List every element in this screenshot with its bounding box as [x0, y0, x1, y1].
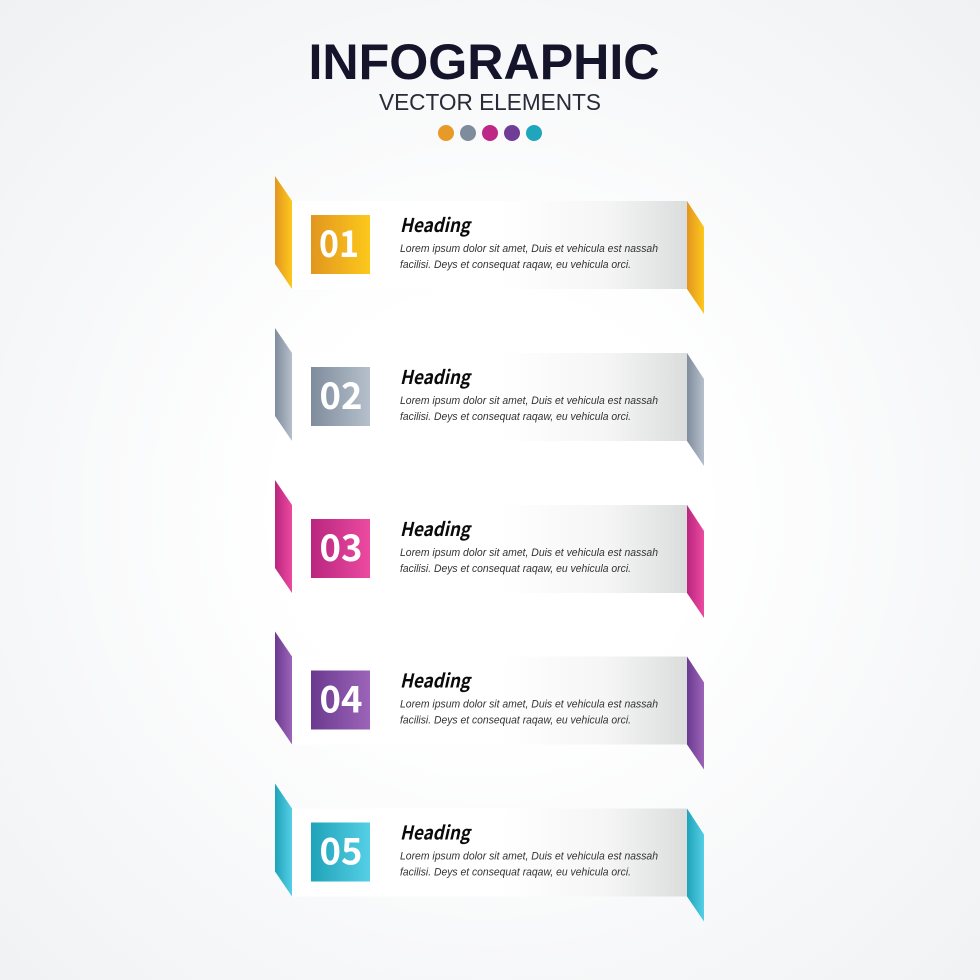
heading: Heading: [400, 515, 472, 542]
panel: step 01: [275, 176, 704, 314]
left tab: [275, 328, 292, 441]
body text: facilisi. Deys et consequat raqaw, eu vehicula orci.: [400, 866, 631, 878]
colour dots: [438, 125, 542, 141]
left tab: [275, 632, 292, 744]
heading: Heading: [400, 666, 472, 694]
left tab: [275, 784, 292, 896]
number badge: [311, 214, 370, 274]
body text: Lorem ipsum dolor sit amet, Duis et vehicula est nassah: [400, 395, 658, 407]
body text: Lorem ipsum dolor sit amet, Duis et vehicula est nassah: [400, 243, 658, 255]
body text: [400, 547, 658, 575]
title: INFOGRAPHIC: [308, 34, 660, 90]
body text: facilisi. Deys et consequat raqaw, eu vehicula orci.: [400, 259, 631, 271]
right tab: [687, 808, 704, 922]
number badge: [311, 366, 370, 426]
heading: Heading: [400, 211, 472, 238]
panel: step 04: [275, 632, 704, 770]
heading: Heading: [400, 363, 472, 390]
left tab: [275, 480, 292, 593]
body text: [400, 395, 658, 423]
body text: facilisi. Deys et consequat raqaw, eu vehicula orci.: [400, 714, 631, 726]
body text: [400, 698, 658, 726]
number badge: 05: [320, 822, 362, 876]
panel: step 05: [275, 784, 704, 922]
number badge: [311, 822, 370, 882]
right tab: [687, 353, 704, 466]
body text: Lorem ipsum dolor sit amet, Duis et vehicula est nassah: [400, 547, 658, 559]
number badge: [311, 518, 370, 578]
number badge: 02: [320, 366, 362, 420]
panel: step 02: [275, 328, 704, 466]
heading: Heading: [400, 818, 472, 846]
banner: [292, 353, 687, 441]
banner: [292, 505, 687, 593]
body text: [400, 243, 658, 271]
left tab: [275, 176, 292, 289]
panel: step 03: [275, 480, 704, 618]
body text: [400, 850, 658, 878]
right tab: [687, 656, 704, 770]
banner: [292, 656, 687, 744]
number badge: 03: [320, 518, 362, 572]
right tab: [687, 505, 704, 618]
banner: [292, 808, 687, 896]
body text: Lorem ipsum dolor sit amet, Duis et vehicula est nassah: [400, 698, 658, 710]
banner: [292, 201, 687, 289]
right tab: [687, 201, 704, 314]
number badge: 04: [320, 670, 362, 724]
number badge: [311, 670, 370, 730]
body text: Lorem ipsum dolor sit amet, Duis et vehicula est nassah: [400, 850, 658, 862]
subtitle: VECTOR ELEMENTS: [379, 89, 601, 115]
body text: facilisi. Deys et consequat raqaw, eu vehicula orci.: [400, 411, 631, 423]
number badge: 01: [319, 214, 359, 268]
body text: facilisi. Deys et consequat raqaw, eu vehicula orci.: [400, 563, 631, 575]
